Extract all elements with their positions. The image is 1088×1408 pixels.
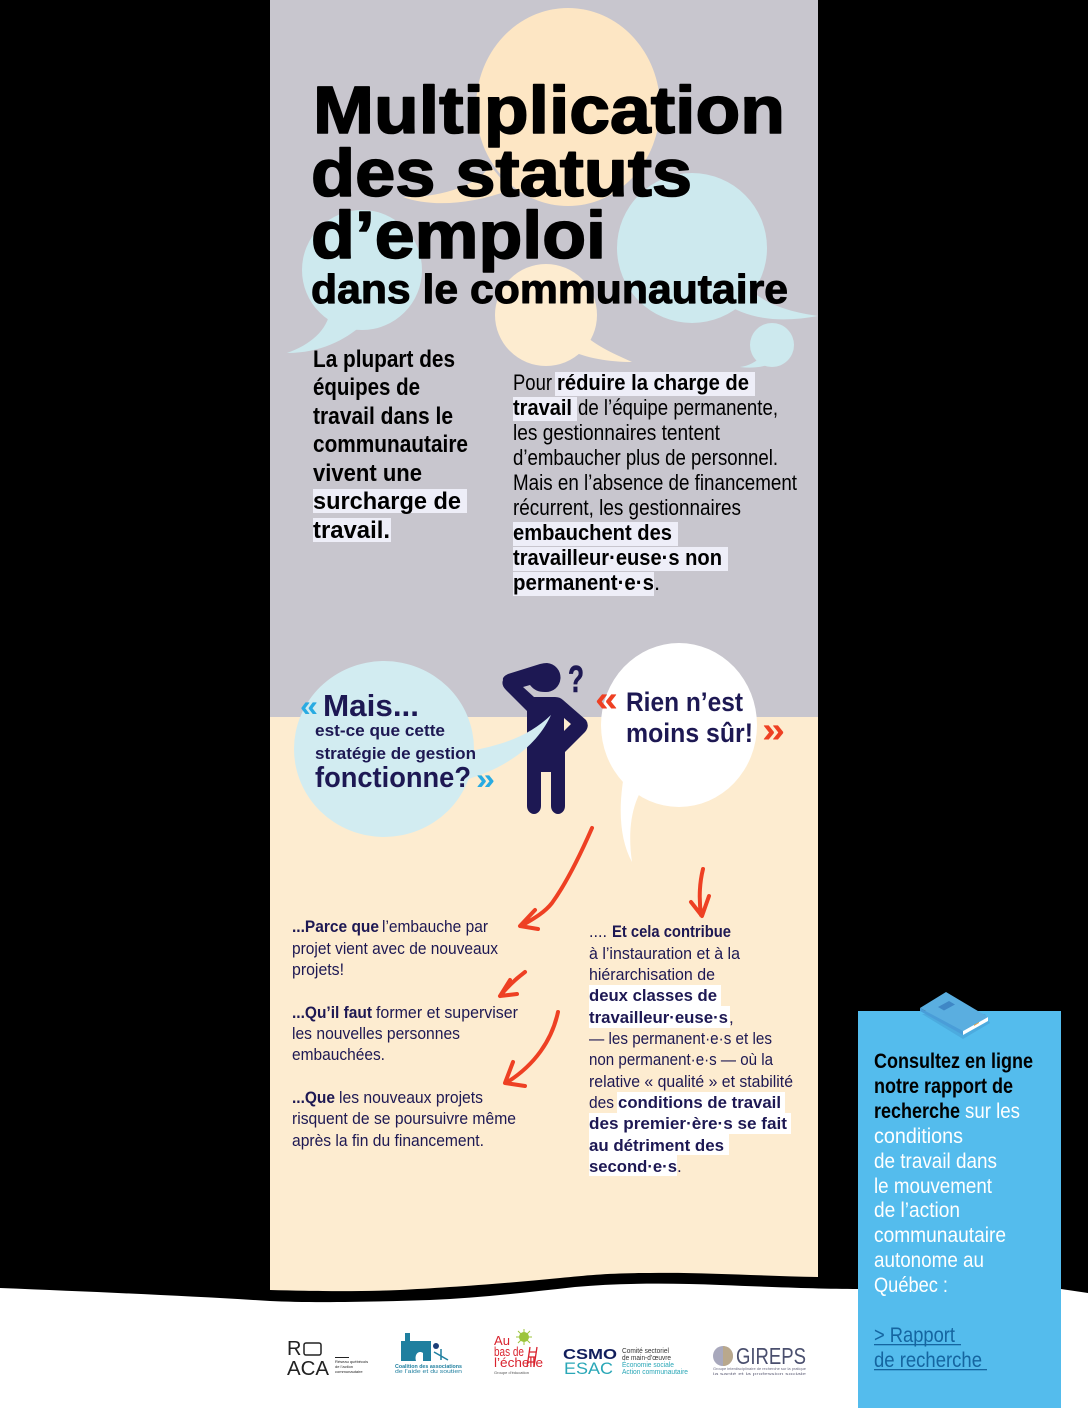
panel: report callout: notre rapport de — [874, 1075, 1013, 1098]
text block: right intro: . — [654, 570, 660, 595]
arrows — [500, 828, 709, 1086]
text block: reasons: projet vient avec de nouveaux — [292, 939, 498, 958]
panel: report callout: de recherche — [874, 1349, 982, 1372]
panel: report callout: de travail dans — [874, 1150, 997, 1173]
text block: left intro: équipes de — [313, 374, 420, 401]
text block: consequences: travailleur·euse·s — [589, 1008, 728, 1027]
text block: consequences: deux classes de — [589, 986, 717, 1005]
text block: consequences: .... — [589, 922, 607, 941]
text block: consequences: des — [589, 1093, 614, 1112]
logo: Au bas de l'echelle: l’échelle — [494, 1355, 543, 1370]
text block: consequences: second·e·s — [589, 1157, 677, 1176]
speech bubble: Rien n'est moins sur: Rien n’est — [626, 687, 743, 717]
speech bubble: Rien n'est moins sur: » — [762, 709, 785, 750]
text block: reasons: projets! — [292, 960, 344, 979]
text block: reasons: embauchées. — [292, 1045, 385, 1064]
text block: consequences: des premier·ère·s se fait — [589, 1114, 787, 1133]
text block: consequences: hiérarchisation de — [589, 965, 715, 984]
logo: Au bas de l'echelle: Au — [494, 1333, 510, 1348]
text block: reasons: risquent de se poursuivre même — [292, 1109, 516, 1128]
logo: Au bas de l'echelle: Groupe d’éducation — [494, 1370, 529, 1375]
speech text: Mais, est-ce que cette strategie de gestion fonctionne: Mais... — [323, 688, 419, 723]
text block: right intro: travailleur·euse·s non — [513, 545, 722, 570]
text block: consequences: Et cela contribue — [612, 922, 731, 941]
text block: reasons: après la fin du financement. — [292, 1131, 484, 1150]
text block: reasons: les nouveaux projets — [339, 1088, 483, 1107]
text block: right intro: réduire la charge de — [557, 370, 749, 395]
text block: consequences: . — [677, 1157, 682, 1176]
text block: right intro: les gestionnaires tentent — [513, 420, 720, 445]
panel: report callout: autonome au — [874, 1249, 984, 1272]
logo: CSMO ESAC: de main-d’œuvre — [622, 1355, 671, 1362]
logo: CSMO ESAC: Comité sectoriel — [622, 1348, 669, 1355]
panel: report callout: de l’action — [874, 1199, 960, 1222]
text block: right intro — [513, 370, 797, 596]
logo: Coalition des associations: de l’aide et du soutien — [395, 1369, 462, 1375]
text block: right intro: Pour — [513, 370, 552, 395]
logo: RQACA: communautaire — [335, 1369, 363, 1374]
logo: CSMO ESAC: ESAC — [564, 1359, 613, 1378]
speech text: Mais, est-ce que cette strategie de gestion fonctionne: » — [476, 763, 495, 796]
logo: Coalition des associations — [395, 1333, 462, 1375]
icon: puzzled person — [465, 659, 588, 814]
panel: report callout: Consultez en ligne — [874, 1050, 1033, 1073]
text block: consequences: non permanent·e·s — où la — [589, 1050, 773, 1069]
logo: GIREPS: Groupe interdisciplinaire de recherche sur la pratique — [713, 1366, 807, 1371]
text block: reasons: ...Que — [292, 1088, 335, 1107]
text block: reasons: l’embauche par — [382, 917, 488, 936]
text block: consequences: — les permanent·e·s et les — [589, 1029, 772, 1048]
text block: left intro: communautaire — [313, 431, 468, 458]
panel: grey upper background — [270, 0, 818, 717]
logo: Coalition des associations: Coalition des associations — [395, 1364, 462, 1370]
text block: right intro: permanent·e·s — [513, 570, 654, 595]
title: dans le communautaire — [311, 266, 788, 312]
text block: reasons: les nouvelles personnes — [292, 1024, 460, 1043]
logo: CSMO ESAC: Action communautaire — [622, 1369, 688, 1376]
logo: GIREPS: la santé et la profession sociale — [713, 1371, 807, 1376]
text block: right intro: de l’équipe permanente, — [578, 395, 778, 420]
speech text: Mais, est-ce que cette strategie de gestion fonctionne: stratégie de gestion — [315, 744, 476, 763]
panel: report callout: conditions — [874, 1125, 963, 1148]
text block: reasons: former et superviser — [376, 1003, 518, 1022]
logo: RQACA: Réseau québécois — [335, 1359, 368, 1364]
panel: report callout — [858, 992, 1061, 1408]
speech bubble: Rien n'est moins sur — [595, 643, 785, 862]
title: d’emploi — [311, 198, 606, 273]
panel: report callout: > Rapport — [874, 1324, 955, 1347]
logo: Au bas de l'echelle: bas de — [494, 1344, 524, 1359]
logo: GIREPS — [713, 1343, 807, 1376]
text block: right intro: d’embaucher plus de personnel. — [513, 445, 778, 470]
title: Multiplication — [313, 73, 785, 148]
text block: right intro: travail — [513, 395, 572, 420]
text block: consequences: conditions de travail — [618, 1093, 781, 1112]
text block: right intro: récurrent, les gestionnaires — [513, 495, 741, 520]
text block: consequences: à l’instauration et à la — [589, 944, 741, 963]
text block: reasons — [292, 917, 518, 1150]
icon: book — [920, 992, 990, 1039]
text block: left intro — [313, 346, 468, 544]
logo: CSMO ESAC — [563, 1346, 688, 1378]
panel: report callout: recherche — [874, 1100, 960, 1123]
panel: report callout: sur les — [965, 1100, 1020, 1123]
panel: report callout: communautaire — [874, 1224, 1006, 1247]
logo: RQACA — [287, 1338, 368, 1380]
title: des statuts — [311, 136, 692, 211]
logo: RQACA: de l’action — [335, 1364, 353, 1369]
text block: consequences: relative « qualité » et stabilité — [589, 1072, 793, 1091]
text block: left intro: vivent une — [313, 460, 422, 487]
text block: right intro: embauchent des — [513, 520, 672, 545]
text block: consequences: au détriment des — [589, 1136, 724, 1155]
text block: consequences — [589, 922, 793, 1176]
speech bubble: Mais — [294, 661, 474, 837]
text block: reasons: ...Parce que — [292, 917, 379, 936]
icon: puzzled person: ? — [568, 659, 584, 701]
text block: left intro: travail. — [313, 517, 390, 544]
text block: left intro: La plupart des — [313, 346, 455, 373]
speech text: Mais, est-ce que cette strategie de gestion fonctionne: fonctionne? — [315, 762, 471, 794]
panel: beige lower background — [270, 717, 818, 1291]
speech bubble: Rien n'est moins sur: « — [595, 678, 618, 719]
logo: CSMO ESAC: Économie sociale — [622, 1360, 674, 1369]
text block: left intro: surcharge de — [313, 488, 461, 515]
speech text: Mais, est-ce que cette strategie de gestion fonctionne — [300, 688, 495, 796]
panel: report callout: le mouvement — [874, 1175, 992, 1198]
text block: left intro: travail dans le — [313, 403, 453, 430]
panel: report callout: Québec : — [874, 1274, 948, 1297]
logo: GIREPS: GIREPS — [736, 1343, 806, 1369]
logo: RQACA: ACA — [287, 1358, 330, 1380]
title — [311, 73, 788, 312]
speech text: Mais, est-ce que cette strategie de gestion fonctionne: est-ce que cette — [315, 721, 445, 740]
speech bubble: Rien n'est moins sur: moins sûr! — [626, 718, 753, 748]
decorative speech bubbles behind title — [287, 8, 818, 368]
logo: RQACA: R — [287, 1338, 301, 1360]
white footer band with wavy edge — [0, 1284, 1088, 1408]
speech text: Mais, est-ce que cette strategie de gestion fonctionne: « — [300, 690, 318, 723]
logo: Au bas de l'echelle — [494, 1329, 543, 1375]
logo: CSMO ESAC: CSMO — [563, 1346, 617, 1363]
text block: right intro: Mais en l’absence de financement — [513, 470, 797, 495]
text block: reasons: ...Qu’il faut — [292, 1003, 372, 1022]
text block: consequences: , — [729, 1008, 734, 1027]
